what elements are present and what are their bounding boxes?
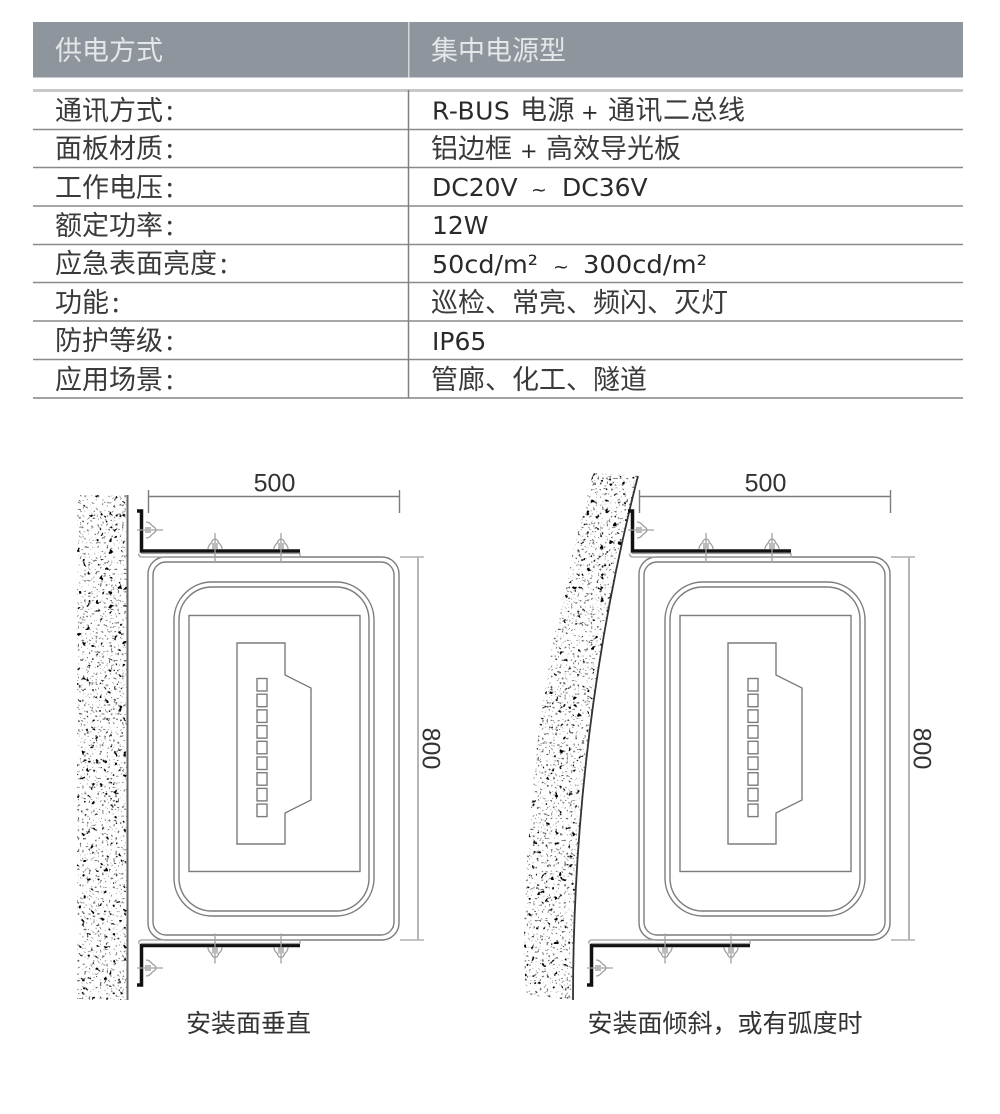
row: protection: IP65 xyxy=(432,327,486,356)
row: voltage: ~ xyxy=(531,179,547,201)
wall texture, curved xyxy=(520,470,640,1002)
wall texture, vertical xyxy=(77,495,127,1000)
header: power supply label: 供电方式 xyxy=(55,29,163,68)
lamp unit with dimensions xyxy=(639,470,936,940)
row: protection xyxy=(55,319,486,358)
row: applications: 管廊、化工、隧道 xyxy=(431,358,647,397)
row: voltage: 工作电压: xyxy=(55,166,174,205)
row: emergency brightness xyxy=(55,242,707,281)
caption: vertical: 安装面垂直 xyxy=(186,1004,311,1040)
row: emergency brightness: 应急表面亮度: xyxy=(55,242,228,281)
caption: inclined: 安装面倾斜，或有弧度时 xyxy=(587,1004,863,1040)
top bracket xyxy=(628,511,791,563)
row: applications: 应用场景: xyxy=(55,358,174,397)
row: panel material: 高效导光板 xyxy=(546,127,681,166)
row: functions: 巡检、常亮、频闪、灭灯 xyxy=(431,281,728,320)
row: communication: 通讯二总线 xyxy=(608,88,746,128)
row: voltage xyxy=(55,166,648,205)
row: panel material xyxy=(55,127,681,166)
diagram: inclined or curved mounting surface xyxy=(520,470,936,1040)
header: power supply value: 集中电源型 xyxy=(431,29,566,68)
row: emergency brightness: 50cd/m² xyxy=(432,250,538,279)
row: rated power xyxy=(55,204,489,243)
diagram: vertical mounting surface xyxy=(77,470,444,1040)
row: panel material: 面板材质: xyxy=(55,127,174,166)
top bracket xyxy=(137,511,300,563)
row: applications xyxy=(55,358,647,397)
bottom bracket xyxy=(587,934,750,985)
row: voltage: DC36V xyxy=(562,173,648,202)
row: communication xyxy=(55,88,746,128)
row: rated power: 12W xyxy=(432,211,489,240)
row: functions xyxy=(55,281,728,320)
row: communication: + xyxy=(581,100,599,124)
row: panel material: 铝边框 xyxy=(431,127,512,166)
row: panel material: + xyxy=(520,139,538,163)
row: communication: 通讯方式: xyxy=(55,89,174,128)
row: functions: 功能: xyxy=(55,281,120,320)
row: voltage: DC20V xyxy=(432,173,518,202)
table header xyxy=(33,22,963,78)
row: protection: 防护等级: xyxy=(55,319,174,358)
row: communication: 电源 xyxy=(520,88,575,128)
row: rated power: 额定功率: xyxy=(55,204,174,243)
row: emergency brightness: 300cd/m² xyxy=(583,250,707,279)
specification table xyxy=(33,88,963,399)
row: emergency brightness: ~ xyxy=(553,256,569,278)
row: communication: R-BUS xyxy=(432,96,510,126)
bottom bracket xyxy=(137,934,300,985)
lamp unit with dimensions xyxy=(148,470,444,940)
